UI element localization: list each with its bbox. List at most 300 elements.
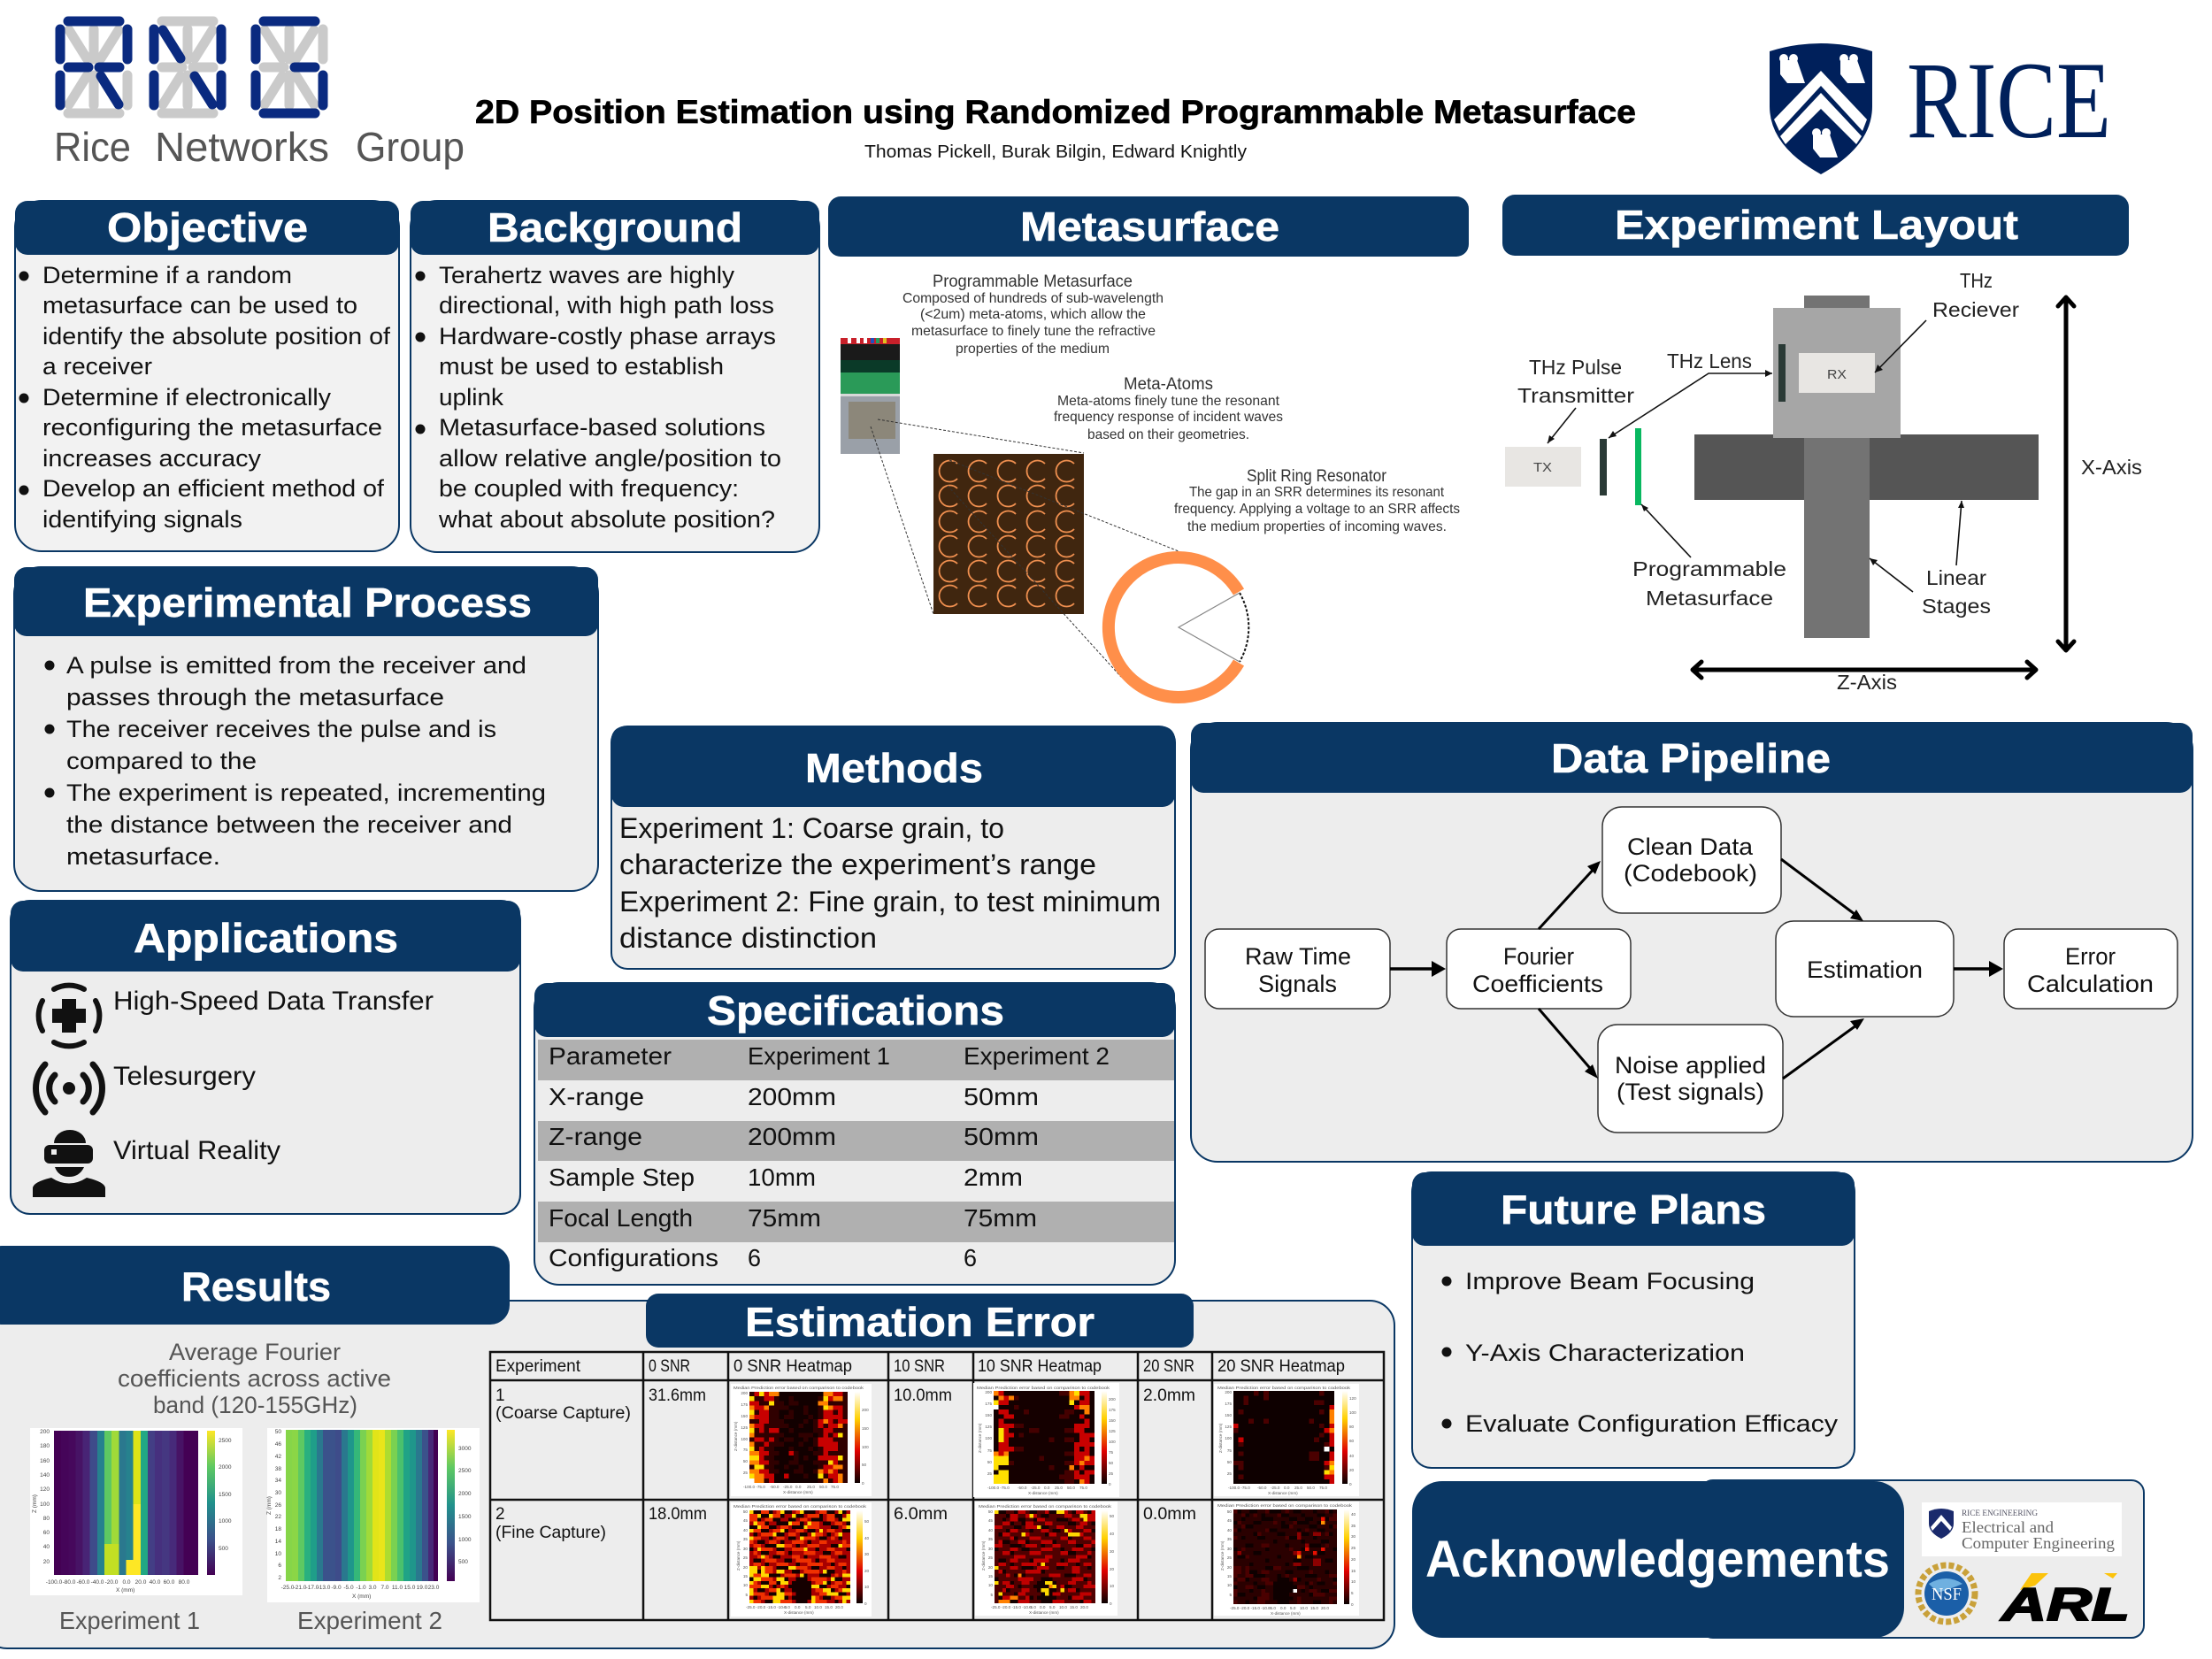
chart: experiment 2 fourier heatmap: -1.0	[356, 1585, 366, 1591]
chart: experiment 1 fourier heatmap: 0.0	[122, 1579, 131, 1586]
panel: experiment layout: Experiment Layout	[1615, 202, 2018, 248]
table text: 2.0mm	[1143, 1386, 1195, 1405]
table text	[495, 1357, 1345, 1542]
chart: experiment 2 fourier heatmap: -25.0	[281, 1585, 295, 1591]
chart: 0 SNR heatmap coarse: -100.0 -75.0	[743, 1485, 765, 1489]
panel: data pipeline	[1191, 723, 2193, 1162]
chart: 10 SNR heatmap coarse: 150	[985, 1413, 992, 1417]
chart: 10 SNR heatmap fine: 35	[988, 1537, 993, 1541]
layout labels: Programmable	[1632, 557, 1786, 580]
panel: background	[411, 201, 819, 552]
specifications table bands	[538, 1040, 1174, 1242]
chart: 20 SNR heatmap coarse: 200	[1225, 1390, 1232, 1394]
panel: objective: identify the absolute position of	[42, 323, 391, 349]
chart: 0 SNR heatmap coarse: 75	[743, 1448, 748, 1452]
panel: metasurface	[828, 196, 1469, 697]
specifications table text: Sample Step	[549, 1164, 695, 1191]
chart: 0 SNR heatmap fine: 0	[864, 1601, 867, 1606]
authors: Thomas Pickell, Burak Bilgin, Edward Knightly	[864, 142, 1247, 162]
node: noise applied	[1598, 1025, 1783, 1133]
chart: 10 SNR heatmap coarse: -50.0	[1018, 1486, 1027, 1490]
chart: experiment 2 fourier heatmap	[266, 1428, 480, 1602]
chart: 0 SNR heatmap fine: 20	[864, 1569, 870, 1573]
chart: 10 SNR heatmap fine: -25.0 -20.0 -15.0 -10.0	[991, 1605, 1032, 1609]
node: noise applied: (Test signals)	[1617, 1079, 1764, 1105]
chart: 20 SNR heatmap coarse: -100.0 -75.0	[1228, 1486, 1250, 1490]
logo: NSF	[1918, 1565, 1975, 1622]
chart: 0 SNR heatmap coarse: 200	[862, 1408, 869, 1412]
panel: objective	[15, 201, 399, 551]
panel: acknowledgements: Acknowledgements	[1425, 1531, 1890, 1588]
panel: methods: Experiment 1: Coarse grain, to	[619, 812, 1004, 844]
chart: experiment 1 fourier heatmap: 60.0	[164, 1579, 175, 1586]
chart: 10 SNR heatmap fine: -5.0	[1029, 1605, 1036, 1609]
text: meta-atoms	[1054, 375, 1283, 442]
chart: experiment 2 fourier heatmap: X (mm)	[352, 1594, 371, 1600]
chart: experiment 1 fourier heatmap: 140	[40, 1472, 50, 1479]
panel: experimental process: The experiment is repeated, incrementing	[66, 780, 546, 806]
specifications table text: 50mm	[964, 1083, 1039, 1110]
node: error calculation: Error	[2065, 943, 2116, 970]
chart: 20 SNR heatmap coarse: -25.0	[1271, 1486, 1280, 1490]
chart: experiment 2 fourier heatmap: 500	[458, 1559, 468, 1565]
panel: background: be coupled with frequency:	[439, 475, 739, 502]
layout labels: THz	[1960, 269, 1993, 292]
panel: methods	[611, 726, 1175, 969]
chart: experiment 1 fourier heatmap: 100	[40, 1502, 50, 1508]
chart: 10 SNR heatmap coarse: 100	[1109, 1440, 1116, 1444]
chart: experiment 1 fourier heatmap: -80.0	[63, 1579, 76, 1586]
chart: 10 SNR heatmap fine: 10	[988, 1583, 993, 1587]
chart: 10 SNR heatmap fine: 10.0	[1059, 1605, 1067, 1609]
chart: 20 SNR heatmap fine	[1214, 1502, 1359, 1616]
chart: 0 SNR heatmap fine: Median Prediction error based on comparison to codebook	[733, 1504, 867, 1509]
panel: methods: Methods	[805, 745, 983, 791]
chart: 20 SNR heatmap coarse: 25	[1227, 1471, 1232, 1476]
logo: Rice ECE: Electrical and	[1962, 1518, 2054, 1536]
chart: 0 SNR heatmap fine: 50	[743, 1509, 748, 1514]
chart: 20 SNR heatmap coarse: 20	[1349, 1468, 1355, 1472]
specifications table text: 75mm	[964, 1204, 1037, 1232]
text: fourier caption	[118, 1339, 391, 1418]
panel: background: directional, with high path loss	[439, 292, 774, 319]
chart: 0 SNR heatmap coarse: 200	[741, 1391, 748, 1395]
chart: 20 SNR heatmap fine: 5.0	[1290, 1606, 1296, 1610]
chart: 10 SNR heatmap fine: 45	[988, 1518, 993, 1523]
text: virtual reality: Virtual Reality	[113, 1136, 280, 1165]
chart: 20 SNR heatmap fine: 15.0	[1310, 1606, 1318, 1610]
chart: experiment 1 fourier heatmap: 1000	[219, 1518, 232, 1525]
chart: 0 SNR heatmap fine: 45	[743, 1518, 748, 1523]
chart: 20 SNR heatmap fine: 45	[1227, 1518, 1232, 1523]
chart: experiment 2 fourier heatmap: 50	[275, 1429, 281, 1435]
chart: 10 SNR heatmap fine: 30	[988, 1547, 993, 1551]
panel: experimental process: Experimental Process	[83, 580, 532, 626]
chart: 20 SNR heatmap coarse: 125	[1225, 1425, 1232, 1429]
panel: experimental process: the distance between the receiver and	[66, 811, 512, 838]
chart: 20 SNR heatmap coarse: Median Prediction error based on comparison to codebook	[1217, 1386, 1351, 1390]
chart: 20 SNR heatmap coarse: -50.0	[1257, 1486, 1267, 1490]
panel: background: uplink	[439, 384, 504, 411]
chart: 0 SNR heatmap fine: 50	[864, 1519, 870, 1524]
specifications table text: Focal Length	[549, 1204, 693, 1232]
panel: experimental process: passes through the metasurface	[66, 684, 444, 710]
dashed zoom lines	[871, 419, 1084, 614]
chart: 10 SNR heatmap fine: 5	[990, 1593, 993, 1597]
text: programmable metasurface	[902, 273, 1164, 357]
table text: 2	[495, 1505, 505, 1524]
chart: 10 SNR heatmap fine: Median Prediction error based on comparison to codebook	[979, 1504, 1112, 1509]
layout labels: Metasurface	[1646, 587, 1773, 610]
chart: 10 SNR heatmap coarse: 200	[1109, 1397, 1116, 1402]
chart: experiment 2 fourier heatmap: 7.0	[380, 1585, 389, 1591]
chart: 10 SNR heatmap coarse: 0.0	[1044, 1486, 1050, 1490]
chart: experiment 1 fourier heatmap: 500	[219, 1546, 228, 1552]
chart: 20 SNR heatmap fine: 10	[1351, 1579, 1356, 1584]
chart: 20 SNR heatmap coarse: 40	[1349, 1454, 1355, 1458]
heading: estimation error	[646, 1294, 1194, 1348]
chart: experiment 1 fourier heatmap: Z (mm)	[32, 1494, 38, 1513]
node: raw time signals: Signals	[1258, 971, 1337, 997]
text: split ring resonator: Split Ring Resonator	[1247, 467, 1387, 486]
chart: experiment 1 fourier heatmap: 180	[40, 1443, 50, 1449]
chart: experiment 2 fourier heatmap: 2500	[458, 1468, 472, 1474]
chart: experiment 2 fourier heatmap: -5.0	[343, 1585, 354, 1591]
chart: 20 SNR heatmap fine: 15	[1351, 1569, 1356, 1573]
chart: 20 SNR heatmap coarse: 50.0	[1307, 1486, 1315, 1490]
panel: future plans: Improve Beam Focusing	[1465, 1268, 1755, 1294]
panel: experimental process: compared to the	[66, 748, 257, 774]
text: programmable metasurface: properties of the medium	[956, 342, 1110, 357]
chart: 10 SNR heatmap fine: 20.0	[1080, 1605, 1088, 1609]
node: fourier coefficients: Fourier	[1503, 943, 1574, 970]
chart: 20 SNR heatmap coarse: 120	[1349, 1396, 1356, 1401]
panel: objective: increases accuracy	[42, 445, 262, 472]
chart: 10 SNR heatmap coarse: 25	[987, 1471, 992, 1476]
table text: (Coarse Capture)	[495, 1404, 631, 1423]
panel: methods: Experiment 2: Fine grain, to test minimum	[619, 886, 1161, 918]
chart: experiment 1 fourier heatmap: 60	[43, 1530, 50, 1536]
panel: results: Results	[181, 1263, 331, 1310]
chart: 10 SNR heatmap coarse: 25.0	[1055, 1486, 1063, 1490]
chart: experiment 2 fourier heatmap: -17.0	[306, 1585, 319, 1591]
axes arrows	[1693, 297, 2074, 678]
leader arrows	[1548, 320, 1962, 592]
panel: data pipeline: Data Pipeline	[1551, 735, 1831, 781]
chart: 0 SNR heatmap coarse: 150	[862, 1426, 869, 1431]
panel: experimental process	[14, 567, 598, 891]
logo: segmented RNG letters	[60, 21, 323, 113]
chart: 0 SNR heatmap coarse: Median Prediction error based on comparison to codebook	[733, 1386, 864, 1390]
chart: experiment 2 fourier heatmap: 26	[275, 1502, 281, 1509]
chart: experiment 2 fourier heatmap: -9.0	[331, 1585, 342, 1591]
chart: 20 SNR heatmap coarse: 0	[1349, 1482, 1352, 1486]
table text: (Fine Capture)	[495, 1524, 606, 1542]
node: clean data: Clean Data	[1627, 833, 1754, 860]
chart: 0 SNR heatmap fine: -5.0	[783, 1605, 790, 1609]
chart: 0 SNR heatmap coarse	[731, 1384, 872, 1496]
chart: experiment 2 fourier heatmap: 22	[275, 1514, 281, 1520]
node: clean data: (Codebook)	[1624, 860, 1757, 887]
title: 2D Position Estimation using Randomized Programmable Metasurface	[475, 94, 1636, 130]
chart: 20 SNR heatmap fine: 20.0	[1321, 1606, 1329, 1610]
node: clean data	[1602, 807, 1781, 913]
specifications table text: 200mm	[748, 1123, 836, 1150]
chart: 10 SNR heatmap coarse: 50	[1109, 1461, 1114, 1465]
specifications table text: 6	[964, 1244, 977, 1271]
logo: Rice Networks Group	[54, 21, 465, 170]
receiver box	[1799, 353, 1875, 393]
panel: background: Background	[488, 204, 742, 250]
text: split ring resonator	[1174, 467, 1460, 534]
chart: 20 SNR heatmap fine: -5.0	[1269, 1606, 1276, 1610]
text: programmable metasurface: metasurface to finely tune the refractive	[911, 324, 1156, 339]
panel: experimental process: metasurface.	[66, 843, 220, 870]
panel: background: Metasurface-based solutions	[439, 414, 765, 441]
chart: 0 SNR heatmap fine: 30	[743, 1547, 748, 1551]
meta-atom array	[933, 454, 1084, 614]
panel: objective: Determine if a random	[42, 262, 292, 288]
chart: 10 SNR heatmap coarse: Z-distance (mm)	[978, 1423, 982, 1453]
specifications table text: Experiment 1	[748, 1042, 890, 1070]
layout labels: Stages	[1922, 595, 1991, 618]
layout labels: Z-Axis	[1837, 671, 1897, 694]
chart: 10 SNR heatmap coarse: 50	[987, 1460, 992, 1464]
chart: experiment 2 fourier heatmap: -21.0	[294, 1585, 307, 1591]
layout labels: Transmitter	[1517, 384, 1634, 407]
chart: experiment 2 fourier heatmap: Z (mm)	[266, 1496, 273, 1515]
panel: experimental process: A pulse is emitted from the receiver and	[66, 652, 526, 679]
chart: 10 SNR heatmap coarse: 150	[1109, 1418, 1116, 1423]
chart: 20 SNR heatmap coarse	[1214, 1384, 1359, 1496]
chart: 20 SNR heatmap fine: 0	[1351, 1602, 1354, 1607]
transmitter box	[1505, 447, 1581, 487]
chart: 20 SNR heatmap fine: 30	[1351, 1534, 1356, 1539]
panel: objective: identifying signals	[42, 506, 242, 533]
chart: 0 SNR heatmap fine: 30	[864, 1552, 870, 1556]
text: meta-atoms: based on their geometries.	[1087, 427, 1249, 442]
chart: 20 SNR heatmap fine: -25.0 -20.0 -15.0 -10.0	[1230, 1606, 1271, 1610]
table text: 10 SNR Heatmap	[978, 1357, 1102, 1376]
chart: 0 SNR heatmap fine: -25.0 -20.0 -15.0 -10.0	[746, 1605, 787, 1609]
chart: experiment 2 fourier heatmap: 38	[275, 1466, 281, 1472]
chart: 10 SNR heatmap fine: 10	[1110, 1584, 1115, 1588]
lenses and metasurface bars	[1600, 344, 1786, 505]
text: split ring resonator: the medium properties of incoming waves.	[1187, 519, 1447, 534]
chart: 0 SNR heatmap fine: 15.0	[825, 1605, 833, 1609]
chart: experiment 1 fourier heatmap	[30, 1428, 242, 1595]
chart: 0 SNR heatmap fine: 10	[743, 1583, 748, 1587]
chart: 20 SNR heatmap coarse: Z-distance (mm)	[1218, 1423, 1223, 1453]
chart: 0 SNR heatmap fine: 5	[745, 1593, 748, 1597]
chart: 20 SNR heatmap fine: 10.0	[1300, 1606, 1308, 1610]
chart: 20 SNR heatmap fine: 5	[1351, 1591, 1354, 1595]
logo: Rice University: RICE	[1907, 40, 2111, 161]
logo: ARL: ARL	[1999, 1579, 2130, 1631]
chart: 0 SNR heatmap fine: 20	[743, 1565, 748, 1570]
chart: 0 SNR heatmap fine: 0.0	[795, 1605, 801, 1609]
panel: objective: reconfiguring the metasurface	[42, 414, 382, 441]
panel: background: what about absolute position?	[438, 506, 775, 533]
panel: objective: Develop an efficient method of	[42, 475, 385, 502]
node: estimation	[1776, 921, 1954, 1017]
node: fourier coefficients	[1447, 929, 1631, 1009]
panel: methods: characterize the experiment’s range	[619, 849, 1096, 880]
chart: experiment 2 fourier heatmap: 2	[278, 1575, 281, 1581]
chart: 20 SNR heatmap fine: 0.0	[1280, 1606, 1286, 1610]
chart: 0 SNR heatmap fine: 5.0	[805, 1605, 811, 1609]
panel: background: must be used to establish	[439, 353, 724, 380]
chart: 0 SNR heatmap coarse: 0	[862, 1481, 864, 1486]
split ring resonator	[948, 460, 1248, 697]
chart: 10 SNR heatmap coarse: 25	[1109, 1471, 1114, 1476]
panel: applications: Applications	[134, 915, 398, 961]
chart: 10 SNR heatmap coarse: 0	[1109, 1482, 1111, 1486]
chart: experiment 1 fourier heatmap: X (mm)	[116, 1587, 134, 1594]
panel: future plans: Future Plans	[1501, 1187, 1766, 1233]
chart: 20 SNR heatmap fine: 30	[1227, 1547, 1232, 1551]
chart: 10 SNR heatmap coarse: 175	[985, 1402, 992, 1406]
logo: Rice University	[1770, 40, 2111, 174]
chart: 20 SNR heatmap coarse: 100	[1349, 1410, 1356, 1415]
chart: 10 SNR heatmap coarse: 75	[987, 1448, 992, 1453]
chart: experiment 2 fourier heatmap: 3000	[458, 1446, 472, 1452]
chart: 10 SNR heatmap coarse: 125	[985, 1425, 992, 1429]
chart: 0 SNR heatmap fine: 35	[743, 1537, 748, 1541]
panel: results	[0, 1246, 1394, 1648]
receiver box: RX	[1827, 367, 1847, 382]
specifications table text: 50mm	[964, 1123, 1039, 1150]
chart: 10 SNR heatmap fine: 50	[988, 1509, 993, 1514]
table text: 6.0mm	[894, 1505, 948, 1524]
table text: 31.6mm	[649, 1386, 706, 1405]
chart: 20 SNR heatmap fine: 35	[1351, 1524, 1356, 1528]
chart: 10 SNR heatmap fine: 15	[988, 1574, 993, 1578]
chart: experiment 1 fourier heatmap: 80.0	[179, 1579, 190, 1586]
panel: experiment layout	[1502, 195, 2142, 694]
chart: 20 SNR heatmap coarse: 75	[1227, 1448, 1232, 1453]
table: estimation error	[490, 1352, 1384, 1620]
chart: 10 SNR heatmap coarse: 125	[1109, 1429, 1116, 1433]
heading: estimation error: Estimation Error	[745, 1299, 1094, 1345]
chart: 10 SNR heatmap coarse: Median Prediction error based on comparison to codebook	[977, 1386, 1110, 1390]
chart: 20 SNR heatmap fine: 25	[1351, 1546, 1356, 1550]
chart: 20 SNR heatmap coarse: 175	[1225, 1402, 1232, 1406]
chart: 0 SNR heatmap coarse: 150	[741, 1414, 748, 1418]
chart: 10 SNR heatmap fine	[975, 1502, 1118, 1616]
chart: experiment 2 fourier heatmap: 1000	[458, 1537, 472, 1543]
chart: experiment 1 fourier heatmap: 1500	[219, 1492, 232, 1498]
chart: experiment 1 fourier heatmap: 200	[40, 1429, 50, 1435]
chart: experiment 2 fourier heatmap: 6	[278, 1563, 281, 1569]
chart: experiment 2 fourier heatmap: 3.0	[368, 1585, 377, 1591]
chart: 10 SNR heatmap fine: 50	[1110, 1514, 1115, 1518]
node: error calculation	[2004, 929, 2177, 1009]
logo: Rice Networks Group: Group	[356, 124, 465, 170]
specifications table text: 6	[748, 1244, 761, 1271]
chart: experiment 2 fourier heatmap: 2000	[458, 1491, 472, 1497]
chart: 10 SNR heatmap coarse: -25.0	[1031, 1486, 1041, 1490]
text: telesurgery: Telesurgery	[113, 1062, 256, 1091]
chart: 20 SNR heatmap fine: 20	[1227, 1565, 1232, 1570]
specifications table text: X-range	[549, 1083, 644, 1110]
chart: 20 SNR heatmap coarse: 100	[1225, 1436, 1232, 1440]
specifications table text: Z-range	[549, 1123, 642, 1150]
chart: 0 SNR heatmap coarse: 100	[862, 1445, 869, 1449]
logo: NSF: NSF	[1932, 1585, 1962, 1604]
chart: 0 SNR heatmap fine: X-distance (mm)	[784, 1610, 814, 1615]
table text: 0.0mm	[1143, 1505, 1196, 1524]
chart: 20 SNR heatmap fine: 5	[1229, 1593, 1232, 1597]
panel: specifications: Specifications	[707, 987, 1004, 1033]
chart: 20 SNR heatmap coarse: 60	[1349, 1439, 1355, 1443]
chart: 0 SNR heatmap coarse: 50	[862, 1463, 867, 1467]
pipeline arrows	[1390, 859, 2003, 1079]
chart: 0 SNR heatmap coarse: 75.0	[831, 1485, 839, 1489]
chart: 20 SNR heatmap fine: 50	[1227, 1509, 1232, 1514]
table text: 20 SNR Heatmap	[1217, 1357, 1345, 1376]
chart: experiment 1 fourier heatmap: -40.0	[91, 1579, 104, 1586]
table text: 0 SNR Heatmap	[733, 1357, 852, 1376]
chart: 0 SNR heatmap coarse: 25.0	[807, 1485, 815, 1489]
chart: 20 SNR heatmap coarse: 75.0	[1319, 1486, 1327, 1490]
chart: experiment 1 fourier heatmap: 160	[40, 1458, 50, 1464]
icon: medical cross	[39, 986, 99, 1046]
chart: 0 SNR heatmap coarse: Z-distance (mm)	[733, 1421, 738, 1451]
chart: experiment 1 fourier heatmap: 40.0	[150, 1579, 161, 1586]
layout labels: THz Lens	[1667, 349, 1752, 373]
chart: 10 SNR heatmap fine: 20	[1110, 1567, 1115, 1571]
node: fourier coefficients: Coefficients	[1472, 971, 1603, 997]
chart: 20 SNR heatmap coarse: 80	[1349, 1425, 1355, 1429]
chart: experiment 2 fourier heatmap: 19.0	[417, 1585, 428, 1591]
text: programmable metasurface: Programmable Metasurface	[933, 273, 1133, 291]
text: programmable metasurface: Composed of hundreds of sub-wavelength	[902, 291, 1164, 306]
chart: 10 SNR heatmap coarse	[973, 1383, 1119, 1497]
chart: experiment 2 fourier heatmap: 46	[275, 1441, 281, 1448]
chart: experiment 2 fourier heatmap: 1500	[458, 1514, 472, 1520]
chart: 10 SNR heatmap coarse: X-distance (mm)	[1028, 1491, 1058, 1495]
specifications table text: 200mm	[748, 1083, 836, 1110]
logo: Rice ECE	[1922, 1502, 2122, 1556]
panel: future plans: Evaluate Configuration Efficacy	[1465, 1410, 1839, 1437]
chart: 0 SNR heatmap coarse: 25	[743, 1471, 748, 1475]
chart: 0 SNR heatmap coarse: 50.0	[819, 1485, 827, 1489]
chart: experiment 2 fourier heatmap: 15.0	[404, 1585, 416, 1591]
chart: experiment 1 fourier heatmap: 2000	[219, 1464, 232, 1471]
chart: 0 SNR heatmap coarse: X-distance (mm)	[783, 1490, 813, 1494]
text: experiment 1 caption: Experiment 1	[59, 1607, 200, 1634]
chart: experiment 2 fourier heatmap: 42	[275, 1454, 281, 1460]
text: fourier caption: coefficients across active	[118, 1365, 391, 1392]
chart: experiment 2 fourier heatmap: -13.0	[318, 1585, 331, 1591]
chart: 0 SNR heatmap coarse: 0.0	[795, 1485, 802, 1489]
chart: 10 SNR heatmap fine: X-distance (mm)	[1029, 1610, 1059, 1615]
chart: 0 SNR heatmap fine: 10	[864, 1585, 870, 1589]
panel: background: Terahertz waves are highly	[439, 262, 735, 288]
table text: Experiment	[495, 1357, 581, 1376]
layout labels	[1517, 269, 2142, 694]
chart: 10 SNR heatmap fine: 0.0	[1040, 1605, 1046, 1609]
chart: 10 SNR heatmap fine: 0	[1110, 1601, 1112, 1606]
logo: Rice ECE: Computer Engineering	[1962, 1534, 2115, 1552]
chart: experiment 2 fourier heatmap: 14	[275, 1539, 281, 1545]
chart: 0 SNR heatmap fine: 15	[743, 1574, 748, 1578]
panel: background: Hardware-costly phase arrays	[439, 323, 776, 349]
text: fourier caption: band (120-155GHz)	[153, 1392, 357, 1418]
chart: 10 SNR heatmap coarse: 50.0	[1067, 1486, 1075, 1490]
chart: experiment 1 fourier heatmap: 2500	[219, 1438, 232, 1444]
